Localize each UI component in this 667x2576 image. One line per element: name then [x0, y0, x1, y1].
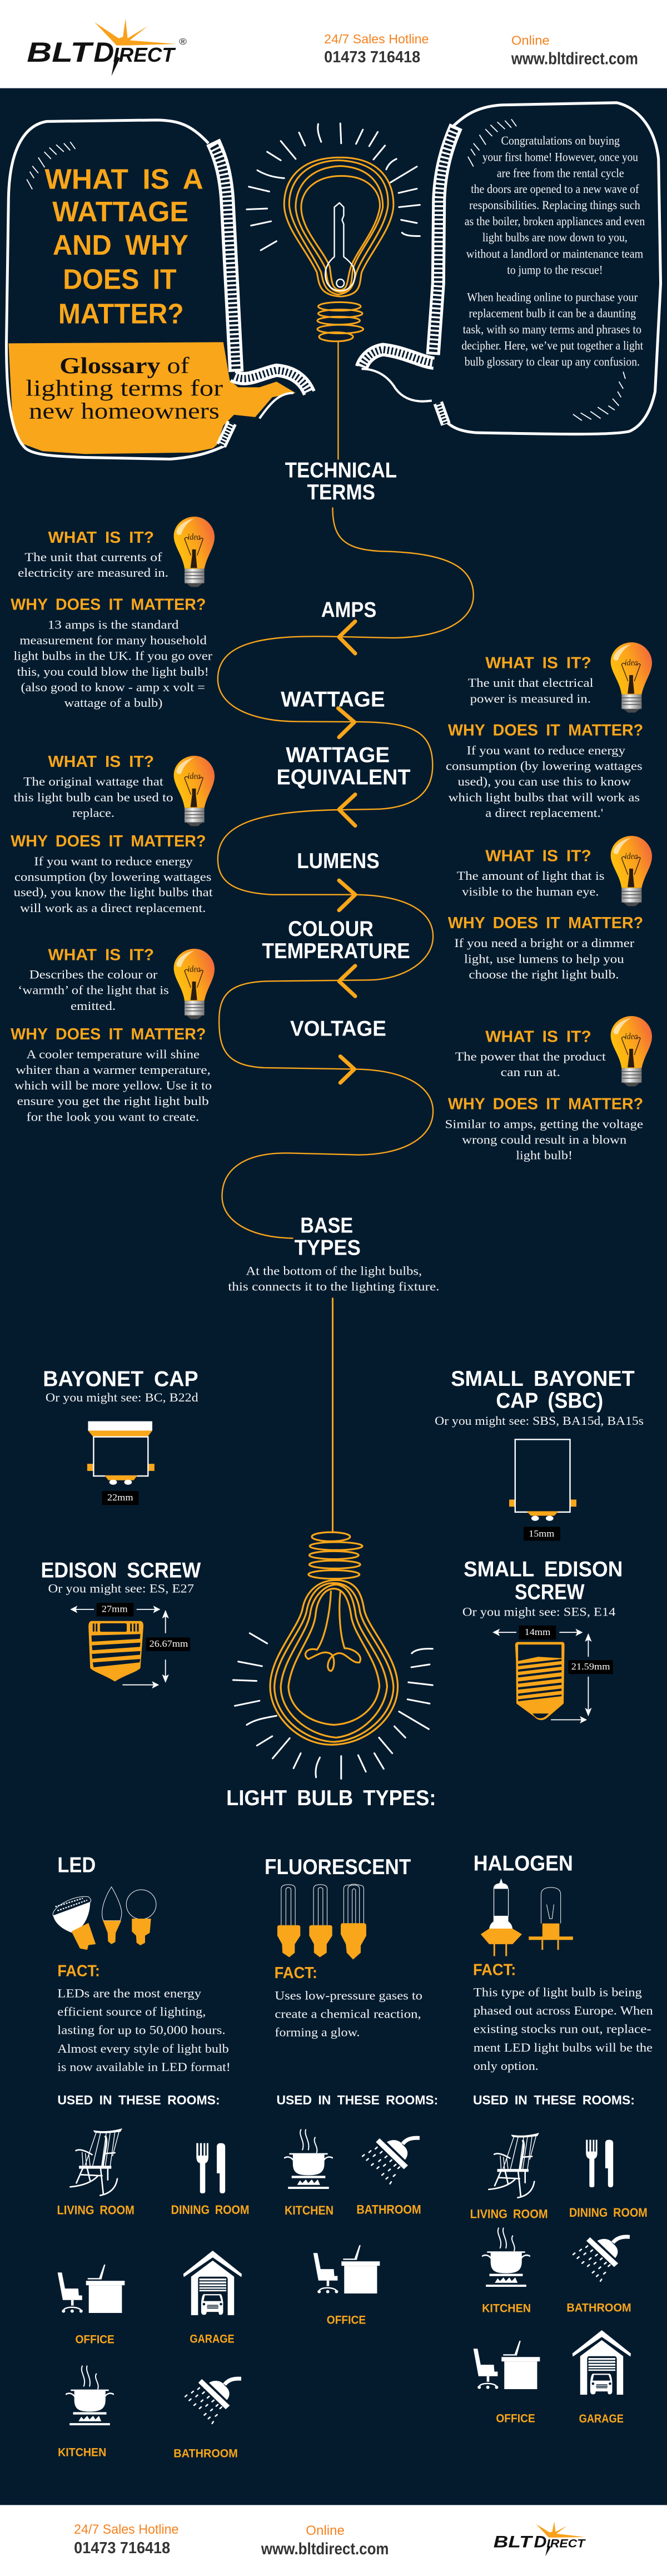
icon: idea bulb wattage equivalent — [174, 756, 215, 826]
column: fluorescent — [265, 1855, 438, 2108]
block: amps: 13 amps is the standard — [48, 618, 178, 632]
bayonet cap: Or you might see: BC, B22d — [46, 1391, 198, 1404]
title: MATTER? — [58, 298, 184, 330]
room labels row one: LIVING ROOM — [470, 2207, 548, 2221]
small bayonet cap: 15mm — [529, 1528, 554, 1539]
heading: base types: BASE — [300, 1213, 353, 1237]
icon: pot fluorescent — [285, 2129, 332, 2189]
block: wattage: power is measured in. — [470, 692, 591, 706]
wire from bulb — [337, 342, 339, 459]
base types intro — [228, 1265, 440, 1294]
room labels row one: LIVING ROOM — [57, 2203, 135, 2217]
block: wattage: a direct replacement.' — [485, 806, 603, 820]
sales hotline — [324, 32, 429, 66]
block: voltage: WHAT IS IT? — [485, 1028, 591, 1046]
icon: small edison base — [515, 1642, 565, 1720]
label: wattage equivalent: EQUIVALENT — [276, 765, 411, 789]
logo: BLT Direct — [27, 18, 187, 76]
block: wattage equivalent: The original wattage that — [23, 775, 163, 789]
icon: idea bulb lumens — [611, 836, 652, 906]
sales hotline: 01473 716418 — [324, 48, 420, 66]
column: fluorescent: USED IN THESE ROOMS: — [276, 2093, 438, 2108]
block: colour temperature: Describes the colour or — [29, 968, 158, 982]
room labels row one: BATHROOM — [356, 2203, 421, 2217]
logo: BLT Direct: BLT — [27, 37, 94, 68]
column: fluorescent: FACT: — [275, 1964, 317, 1981]
column: LED: Almost every style of light bulb — [57, 2042, 229, 2055]
column: LED: FACT: — [57, 1962, 100, 1980]
block: voltage: The power that the product — [455, 1050, 606, 1064]
block: lumens: choose the right light bulb. — [469, 968, 619, 982]
column: halogen: HALOGEN — [474, 1851, 573, 1875]
block: wattage: The unit that electrical — [468, 676, 594, 690]
glossary subtitle: Glossary of — [59, 354, 190, 378]
small edison screw: SCREW — [515, 1579, 585, 1604]
block: colour temperature: A cooler temperature will shine — [26, 1048, 200, 1062]
icon: shower halogen — [573, 2237, 630, 2281]
section: light bulb types — [53, 1786, 653, 2221]
footer logo: D — [534, 2532, 546, 2551]
block: amps: measurement for many household — [19, 634, 207, 647]
icon: small bayonet base — [509, 1439, 576, 1521]
label: wattage equivalent — [276, 742, 411, 789]
block: amps: light bulbs in the UK. If you go over — [13, 650, 212, 663]
column: LED: lasting for up to 50,000 hours. — [57, 2024, 226, 2037]
orange glossary panel — [8, 342, 296, 454]
block: amps: WHAT IS IT? — [48, 528, 154, 546]
icon: pot LED — [66, 2366, 113, 2425]
edison screw: EDISON SCREW — [41, 1558, 201, 1582]
block: colour temperature — [11, 946, 212, 1124]
chevrons — [338, 621, 355, 910]
title: WATTAGE — [52, 196, 188, 227]
small bayonet cap — [435, 1366, 644, 1540]
block: amps: electricity are measured in. — [18, 566, 168, 580]
base types intro: At the bottom of the light bulbs, — [246, 1265, 422, 1278]
heading: technical terms — [285, 458, 397, 504]
column: fluorescent: Uses low-pressure gases to — [275, 1989, 422, 2003]
label: voltage: VOLTAGE — [290, 1016, 386, 1041]
block: wattage equivalent: replace. — [72, 806, 115, 820]
label: amps: AMPS — [321, 597, 376, 622]
icon: pot halogen — [482, 2228, 530, 2287]
logo: BLT Direct: D — [93, 37, 114, 68]
icon: LED bulbs — [53, 1887, 156, 1950]
block: wattage equivalent: WHY DOES IT MATTER? — [11, 832, 206, 850]
glossary subtitle: new homeowners — [29, 399, 220, 424]
column: halogen: FACT: — [473, 1961, 516, 1979]
icon: shower fluorescent — [362, 2138, 420, 2184]
arrows: edison dimensions — [70, 1606, 169, 1688]
block: wattage equivalent: used), you know the light bulbs that — [13, 886, 213, 899]
block: colour temperature: which will be more yellow. Use it to — [14, 1079, 212, 1093]
footer online: Online — [306, 2523, 345, 2538]
section: room labels and footer — [58, 2301, 631, 2558]
icon: desk fluorescent — [313, 2245, 380, 2293]
section: colour temperature and voltage — [11, 917, 643, 1533]
introduction text — [461, 134, 645, 369]
room labels: GARAGE — [190, 2332, 235, 2346]
room labels: GARAGE — [579, 2412, 624, 2425]
room labels row one — [57, 2203, 648, 2221]
icon: idea bulb colour temperature — [174, 949, 215, 1019]
icon: desk halogen — [474, 2341, 540, 2389]
block: amps: The unit that currents of — [24, 551, 162, 564]
icon: idea bulb voltage — [611, 1016, 652, 1086]
edison screw: 26.67mm — [150, 1638, 188, 1649]
footer hotline: 01473 716418 — [74, 2539, 170, 2557]
column: LED: LED — [57, 1852, 96, 1877]
section: technical terms — [11, 458, 643, 1239]
column: LED: is now available in LED format! — [57, 2060, 231, 2074]
room labels: OFFICE — [327, 2314, 366, 2327]
block: amps — [11, 528, 212, 710]
online address: Online — [511, 33, 550, 48]
icon: shower LED — [185, 2379, 241, 2424]
footer hotline: 24/7 Sales Hotline — [74, 2521, 178, 2537]
icon: rocking chair LED — [70, 2128, 122, 2196]
wire to hanging bulb — [332, 1299, 334, 1533]
column: LED — [53, 1852, 231, 2108]
logo: BLT Direct: IRECT — [113, 44, 176, 66]
room labels: BATHROOM — [173, 2447, 238, 2460]
label: colour temperature: TEMPERATURE — [262, 939, 410, 963]
block: colour temperature: WHY DOES IT MATTER? — [11, 1025, 206, 1043]
block: voltage: light bulb! — [516, 1149, 573, 1162]
icon: fluorescent bulbs — [277, 1884, 366, 1959]
footer online — [261, 2523, 389, 2558]
winding wire — [218, 508, 474, 1239]
room labels row one: DINING ROOM — [171, 2203, 249, 2217]
icon: key — [325, 203, 355, 291]
icon: hanging light bulb — [233, 1532, 432, 1779]
rays — [247, 123, 420, 250]
heading: technical terms: TERMS — [307, 480, 375, 504]
rays — [233, 1633, 432, 1779]
bayonet cap: BAYONET CAP — [43, 1366, 198, 1391]
block: amps: wattage of a bulb) — [64, 696, 162, 710]
section: header and intro — [6, 18, 661, 459]
column: fluorescent: FLUORESCENT — [265, 1855, 411, 1879]
label: colour temperature: COLOUR — [288, 917, 374, 941]
column: LED: LEDs are the most energy — [57, 1987, 202, 2000]
chevrons — [339, 966, 355, 1083]
footer logo — [494, 2521, 586, 2556]
block: wattage equivalent — [11, 752, 213, 915]
block: colour temperature: for the look you want to create. — [26, 1110, 199, 1124]
label: wattage equivalent: WATTAGE — [286, 742, 390, 767]
base types intro: this connects it to the lighting fixture. — [228, 1280, 440, 1294]
arrows: small edison dimensions — [492, 1629, 592, 1723]
block: colour temperature: WHAT IS IT? — [48, 946, 154, 964]
column: halogen — [473, 1851, 653, 2108]
icon: rocking chair halogen — [489, 2133, 539, 2198]
block: amps: this, you could blow the light bulb! — [17, 665, 209, 678]
heading: base types: TYPES — [295, 1235, 361, 1260]
heading: technical terms: TECHNICAL — [285, 458, 397, 482]
block: wattage: WHAT IS IT? — [485, 654, 591, 672]
block: wattage — [446, 654, 643, 820]
room labels row one: KITCHEN — [285, 2204, 334, 2218]
title: WHAT IS A — [44, 163, 203, 195]
column: halogen: only option. — [474, 2059, 539, 2073]
block: colour temperature: whiter than a warmer temperature, — [16, 1063, 211, 1077]
icon: idea bulb amps — [174, 517, 215, 587]
block: amps: WHY DOES IT MATTER? — [11, 596, 206, 613]
block: wattage equivalent: If you want to reduce energy — [34, 855, 193, 869]
bayonet cap: 22mm — [107, 1492, 133, 1503]
icon: garage LED — [183, 2251, 242, 2315]
title: AND WHY — [53, 229, 188, 261]
column: LED: USED IN THESE ROOMS: — [57, 2093, 220, 2108]
block: amps: (also good to know - amp x volt = — [21, 681, 205, 694]
column: fluorescent: create a chemical reaction, — [275, 2008, 421, 2021]
block: lumens: The amount of light that is — [457, 869, 605, 883]
icon: halogen bulbs — [481, 1879, 573, 1956]
block: lumens — [448, 847, 643, 982]
edison screw: 27mm — [102, 1604, 128, 1614]
block: wattage equivalent: consumption (by lowering wattages — [14, 870, 211, 884]
icon: edison base — [88, 1621, 143, 1681]
block: voltage: can run at. — [501, 1066, 560, 1079]
block: lumens: WHAT IS IT? — [485, 847, 591, 865]
icon: cutlery halogen — [586, 2140, 613, 2187]
title: DOES IT — [63, 263, 177, 295]
block: colour temperature: ensure you get the right light bulb — [17, 1094, 209, 1108]
label: lumens: LUMENS — [297, 849, 380, 873]
title — [44, 163, 203, 330]
heading: light bulb types: LIGHT BULB TYPES: — [226, 1786, 436, 1810]
edison screw — [41, 1558, 201, 1688]
sales hotline: 24/7 Sales Hotline — [324, 32, 429, 47]
block: colour temperature: ‘warmth’ of the light that is — [18, 984, 169, 997]
introduction text: to jump to the rescue! — [507, 264, 603, 277]
hatched ribbon — [27, 142, 309, 445]
room labels: KITCHEN — [482, 2302, 531, 2315]
bubble outline — [6, 120, 226, 459]
room labels — [58, 2301, 631, 2460]
room labels: OFFICE — [496, 2412, 535, 2425]
block: lumens: visible to the human eye. — [462, 885, 599, 899]
online address — [511, 33, 638, 68]
section: base types — [41, 1366, 644, 1779]
block: wattage equivalent: will work as a direct replacement. — [20, 901, 206, 915]
column: fluorescent: forming a glow. — [275, 2026, 360, 2039]
label: colour temperature — [262, 917, 410, 963]
block: voltage — [445, 1028, 643, 1162]
room labels: OFFICE — [75, 2333, 115, 2346]
icon: desk LED — [58, 2265, 125, 2313]
heading: base types — [295, 1213, 361, 1260]
edison screw: Or you might see: ES, E27 — [48, 1582, 194, 1596]
icon: cutlery LED — [196, 2143, 225, 2193]
small edison screw: 14mm — [525, 1627, 551, 1637]
icon: light bulb with key — [247, 123, 420, 341]
bayonet cap — [43, 1366, 198, 1505]
block: wattage equivalent: WHAT IS IT? — [48, 752, 154, 770]
block: colour temperature: emitted. — [71, 999, 116, 1013]
footer logo: IRECT — [546, 2537, 586, 2550]
small bayonet cap: CAP (SBC) — [496, 1388, 603, 1413]
glossary subtitle: lighting terms for — [26, 376, 223, 401]
glossary subtitle — [26, 354, 223, 424]
column: LED: efficient source of lighting, — [57, 2005, 206, 2019]
icon: bayonet base — [87, 1421, 155, 1485]
block: wattage equivalent: this light bulb can be used to — [13, 791, 173, 804]
speech bubble: introduction — [362, 103, 661, 434]
logo: BLT Direct: ® — [179, 37, 187, 47]
footer online: www.bltdirect.com — [261, 2539, 389, 2558]
footer hotline — [74, 2521, 178, 2557]
small edison screw: 21.59mm — [571, 1661, 610, 1672]
icon: idea bulb wattage — [611, 642, 652, 712]
small edison screw — [462, 1557, 623, 1723]
icon: garage halogen — [573, 2330, 631, 2395]
label: wattage: WATTAGE — [281, 687, 385, 711]
speech bubble: title — [6, 120, 309, 459]
footer logo: BLT — [494, 2532, 534, 2551]
room labels: KITCHEN — [58, 2446, 106, 2459]
